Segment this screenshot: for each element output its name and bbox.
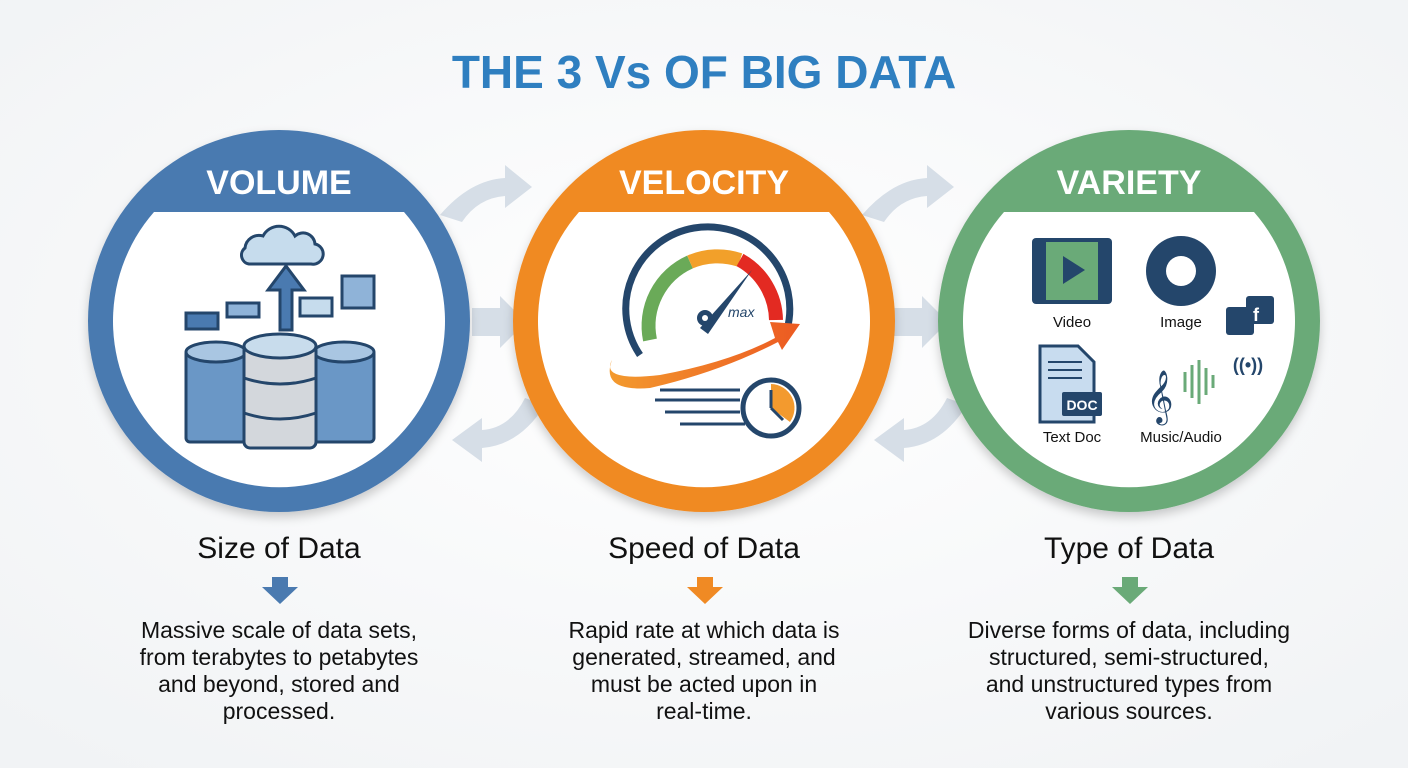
arrow: variety down bbox=[1112, 577, 1148, 604]
icon group: data types: ((•)) bbox=[1233, 355, 1263, 375]
text block: volume description: processed. bbox=[223, 698, 335, 724]
arrow: volume down bbox=[262, 577, 298, 604]
icon group: data types: Image bbox=[1160, 314, 1202, 331]
text block: variety description: and unstructured types from bbox=[986, 671, 1272, 697]
panel: volume circle bbox=[88, 130, 470, 512]
icon group: data types: Music/Audio bbox=[1140, 429, 1222, 446]
heading: speed of data: Speed of Data bbox=[608, 532, 800, 565]
text block: volume description: Massive scale of data sets, bbox=[141, 617, 417, 643]
arrows: volume to velocity bbox=[440, 165, 545, 462]
panel: velocity circle: VELOCITY bbox=[619, 164, 789, 202]
title: THE 3 Vs OF BIG DATA bbox=[452, 46, 956, 98]
text block: velocity description: generated, streamed, and bbox=[572, 644, 836, 670]
arrows: velocity to variety bbox=[862, 165, 967, 462]
text block: velocity description: real-time. bbox=[656, 698, 752, 724]
heading: type of data: Type of Data bbox=[1044, 532, 1214, 565]
panel: velocity circle bbox=[513, 130, 895, 512]
icon group: data types: DOC bbox=[1066, 397, 1098, 413]
text block: variety description: various sources. bbox=[1045, 698, 1213, 724]
text block: volume description: from terabytes to petabytes bbox=[140, 644, 418, 670]
icon group: data types: f bbox=[1253, 305, 1260, 325]
text block: volume description: and beyond, stored and bbox=[158, 671, 400, 697]
arrow: velocity down bbox=[687, 577, 723, 604]
text block: velocity description: must be acted upon in bbox=[591, 671, 817, 697]
text block: variety description: structured, semi-structured, bbox=[989, 644, 1269, 670]
text block: velocity description: Rapid rate at which data is bbox=[568, 617, 840, 643]
heading: size of data: Size of Data bbox=[197, 532, 361, 565]
text block: variety description: Diverse forms of data, including bbox=[968, 617, 1290, 643]
panel: volume circle: VOLUME bbox=[206, 164, 352, 202]
icon group: data types: Video bbox=[1053, 314, 1091, 331]
panel: variety circle bbox=[938, 130, 1320, 512]
panel: variety circle: VARIETY bbox=[1057, 164, 1202, 202]
icon group: data types: Text Doc bbox=[1043, 429, 1102, 446]
icon: speedometer and clock bbox=[610, 227, 800, 436]
icon group: data types: 𝄞 bbox=[1146, 370, 1174, 425]
icon: speedometer and clock: max bbox=[728, 304, 755, 320]
icon group: data types bbox=[1032, 236, 1274, 446]
icon: databases with cloud bbox=[186, 226, 374, 448]
